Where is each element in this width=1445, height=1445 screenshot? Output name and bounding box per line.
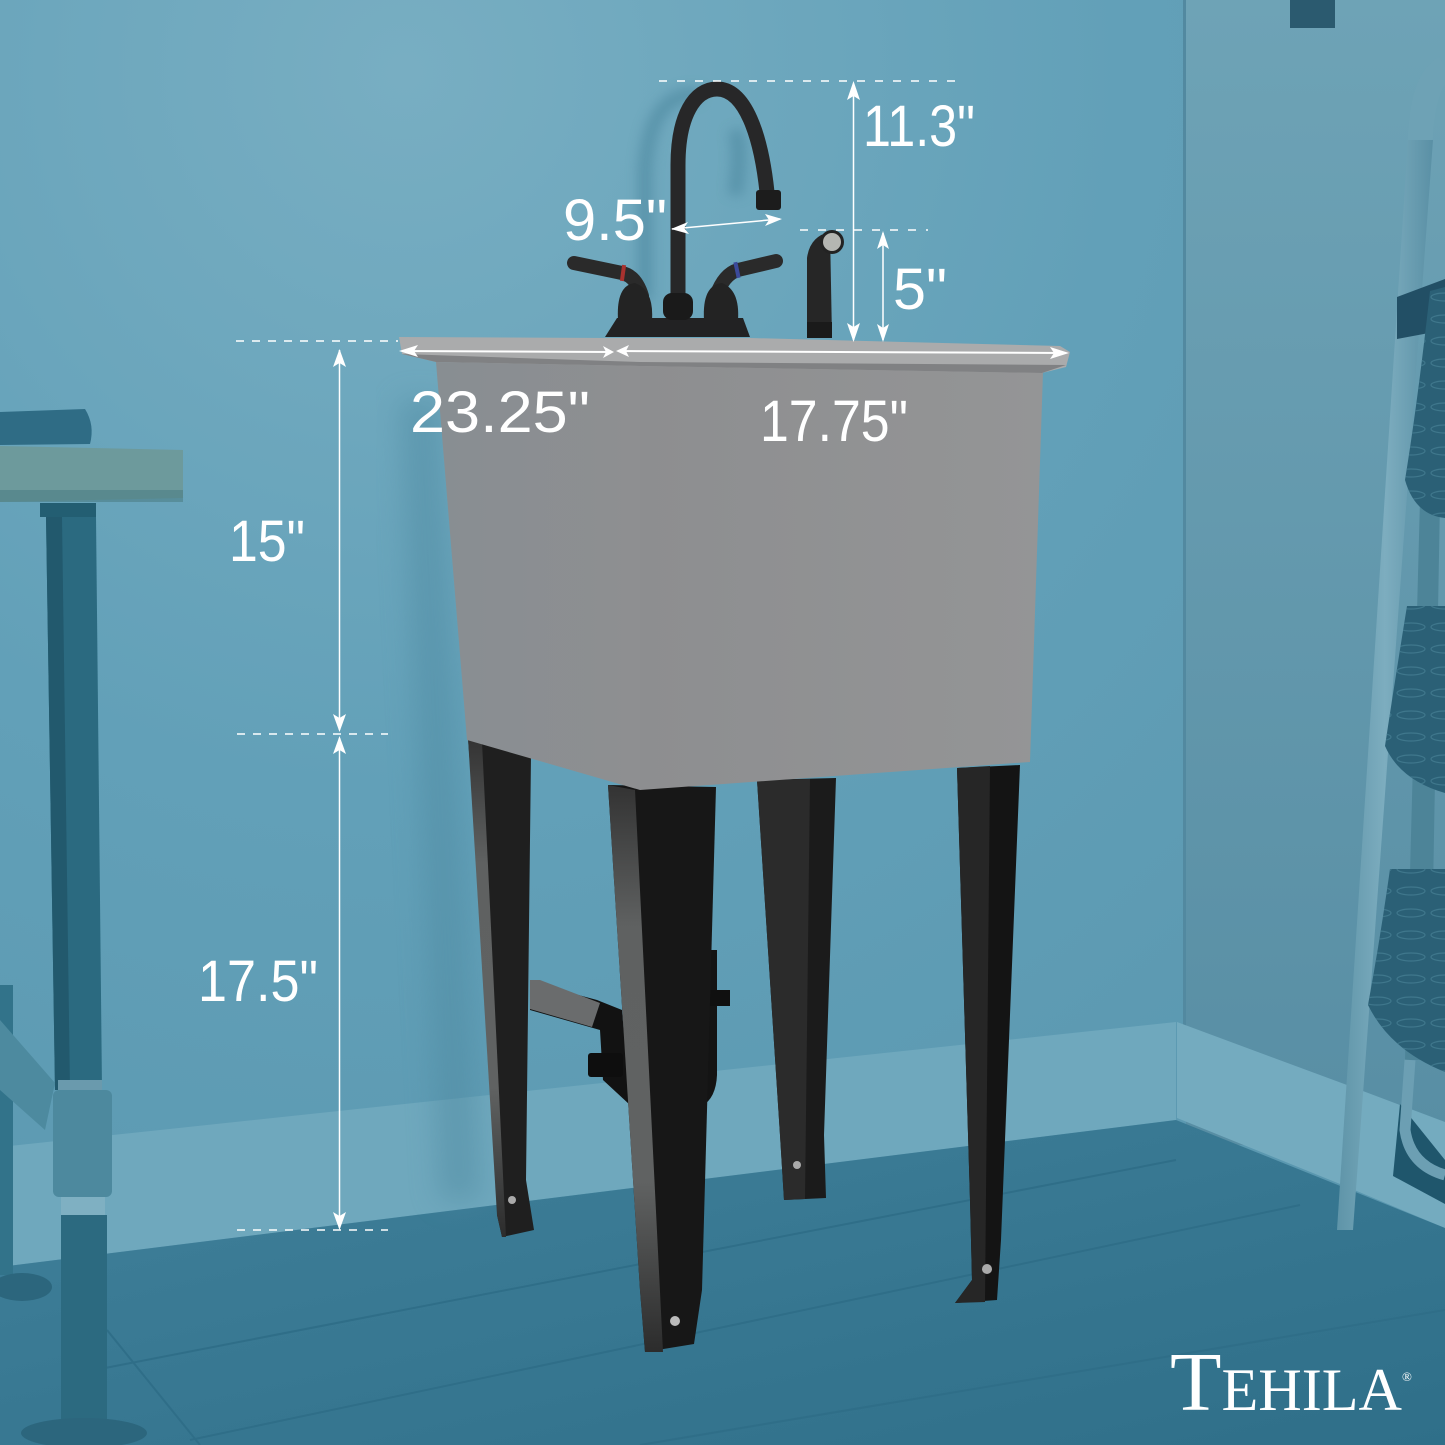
shadow: sink on wall bbox=[400, 400, 480, 1200]
left handle bbox=[574, 263, 642, 296]
label: tub height: 15" bbox=[229, 509, 305, 574]
back right leg bbox=[757, 778, 836, 1200]
flange bbox=[21, 1418, 147, 1445]
step ladder at right bbox=[1290, 0, 1445, 1230]
stool upper pipe bbox=[46, 517, 102, 1090]
front right leg bbox=[955, 765, 1020, 1303]
drain pipe bbox=[530, 950, 730, 1106]
logo: Tehila: TEHILA bbox=[1170, 1336, 1402, 1429]
ladder rail top bbox=[1420, 68, 1445, 145]
ladder bracket bbox=[1397, 279, 1445, 339]
sink tub bbox=[399, 337, 1070, 790]
label: leg height: 17.5" bbox=[198, 949, 318, 1014]
sink legs bbox=[468, 738, 1020, 1352]
floor bbox=[0, 1120, 1445, 1445]
label: faucet height: 11.3" bbox=[863, 94, 975, 159]
front centre leg bbox=[608, 785, 716, 1352]
rear ladder legs bbox=[1405, 500, 1440, 1060]
dimension arrowheads bbox=[333, 81, 1069, 1230]
stool collar bbox=[40, 503, 96, 517]
diagonal brace bbox=[0, 1020, 55, 1130]
spout nozzle bbox=[756, 190, 781, 210]
side sprayer bbox=[807, 232, 832, 337]
stool at left bbox=[0, 409, 183, 1445]
stool seat bbox=[0, 446, 183, 502]
rear pipe bbox=[0, 985, 13, 1275]
ladder foot bbox=[1393, 1104, 1445, 1204]
thread bbox=[58, 1080, 102, 1098]
right handle bbox=[716, 261, 776, 296]
logo registered mark: ® bbox=[1402, 1369, 1412, 1384]
back left leg bbox=[468, 738, 534, 1237]
faucet base bbox=[605, 318, 750, 337]
tub left side bbox=[436, 362, 640, 790]
label: sprayer height: 5" bbox=[893, 257, 947, 322]
tub front side bbox=[640, 365, 1043, 790]
tub rim bbox=[399, 337, 1070, 373]
label: width: 17.75" bbox=[760, 389, 908, 454]
shadow: faucet on wall bbox=[645, 95, 738, 300]
gooseneck spout bbox=[678, 89, 767, 296]
pipe coupling bbox=[53, 1090, 112, 1197]
ladder steps bbox=[1368, 287, 1445, 1072]
lower pipe bbox=[61, 1215, 107, 1420]
dimension lines bbox=[236, 81, 1066, 1230]
baseboard: right wall bbox=[1177, 1022, 1445, 1228]
towel bbox=[0, 409, 92, 445]
ladder rail bbox=[1337, 140, 1433, 1230]
label: spout reach: 9.5" bbox=[563, 188, 667, 253]
baseboard: left wall bbox=[0, 1022, 1176, 1267]
wall bracket bbox=[1290, 0, 1335, 28]
label: depth: 23.25" bbox=[410, 380, 590, 445]
faucet bbox=[574, 89, 844, 338]
